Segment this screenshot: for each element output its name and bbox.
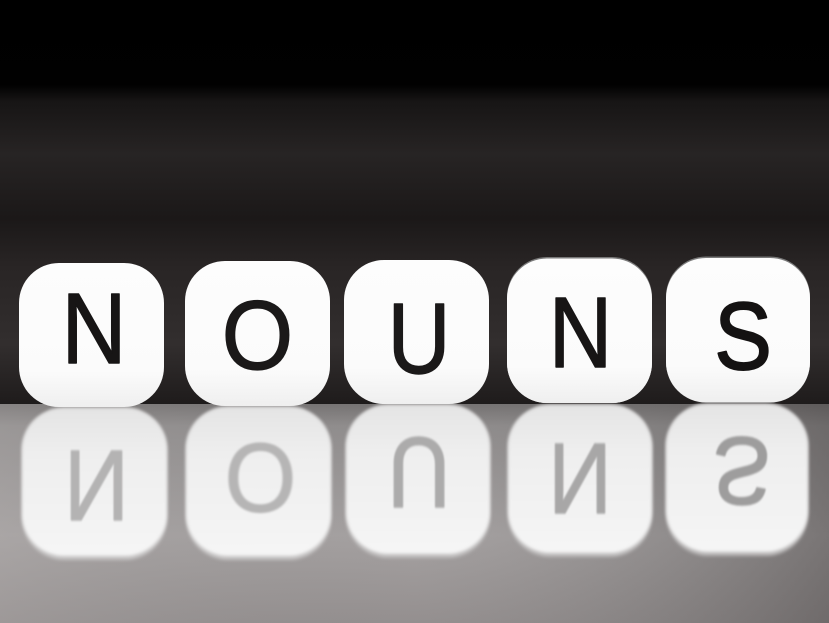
reflection: letter O tile (186, 407, 331, 560)
tile: letter S (666, 256, 810, 402)
tile: letter N (19, 263, 164, 407)
reflection: letter S tile (666, 404, 808, 556)
tile: letter O: O (222, 281, 293, 391)
tile: letter U: U (388, 282, 450, 394)
background: dark wall (0, 0, 829, 405)
reflection: letter S tile: S (713, 417, 770, 523)
tile: letter S: S (714, 284, 772, 390)
tile: letter U (344, 260, 489, 404)
reflection: letter N tile (22, 408, 167, 560)
reflection: letter N tile: N (64, 429, 129, 540)
reflection: letter U tile (346, 405, 490, 558)
reflection: letter N tile: N (548, 423, 612, 534)
tile: letter N: N (62, 274, 126, 385)
background: reflective floor (0, 404, 829, 623)
reflection: letter U tile: U (388, 417, 450, 529)
reflection: letter O tile: O (225, 422, 296, 532)
reflection: letter N tile (508, 405, 652, 557)
tile: letter N (507, 257, 652, 403)
tile: letter N: N (549, 277, 612, 388)
tile: letter O (185, 261, 330, 406)
